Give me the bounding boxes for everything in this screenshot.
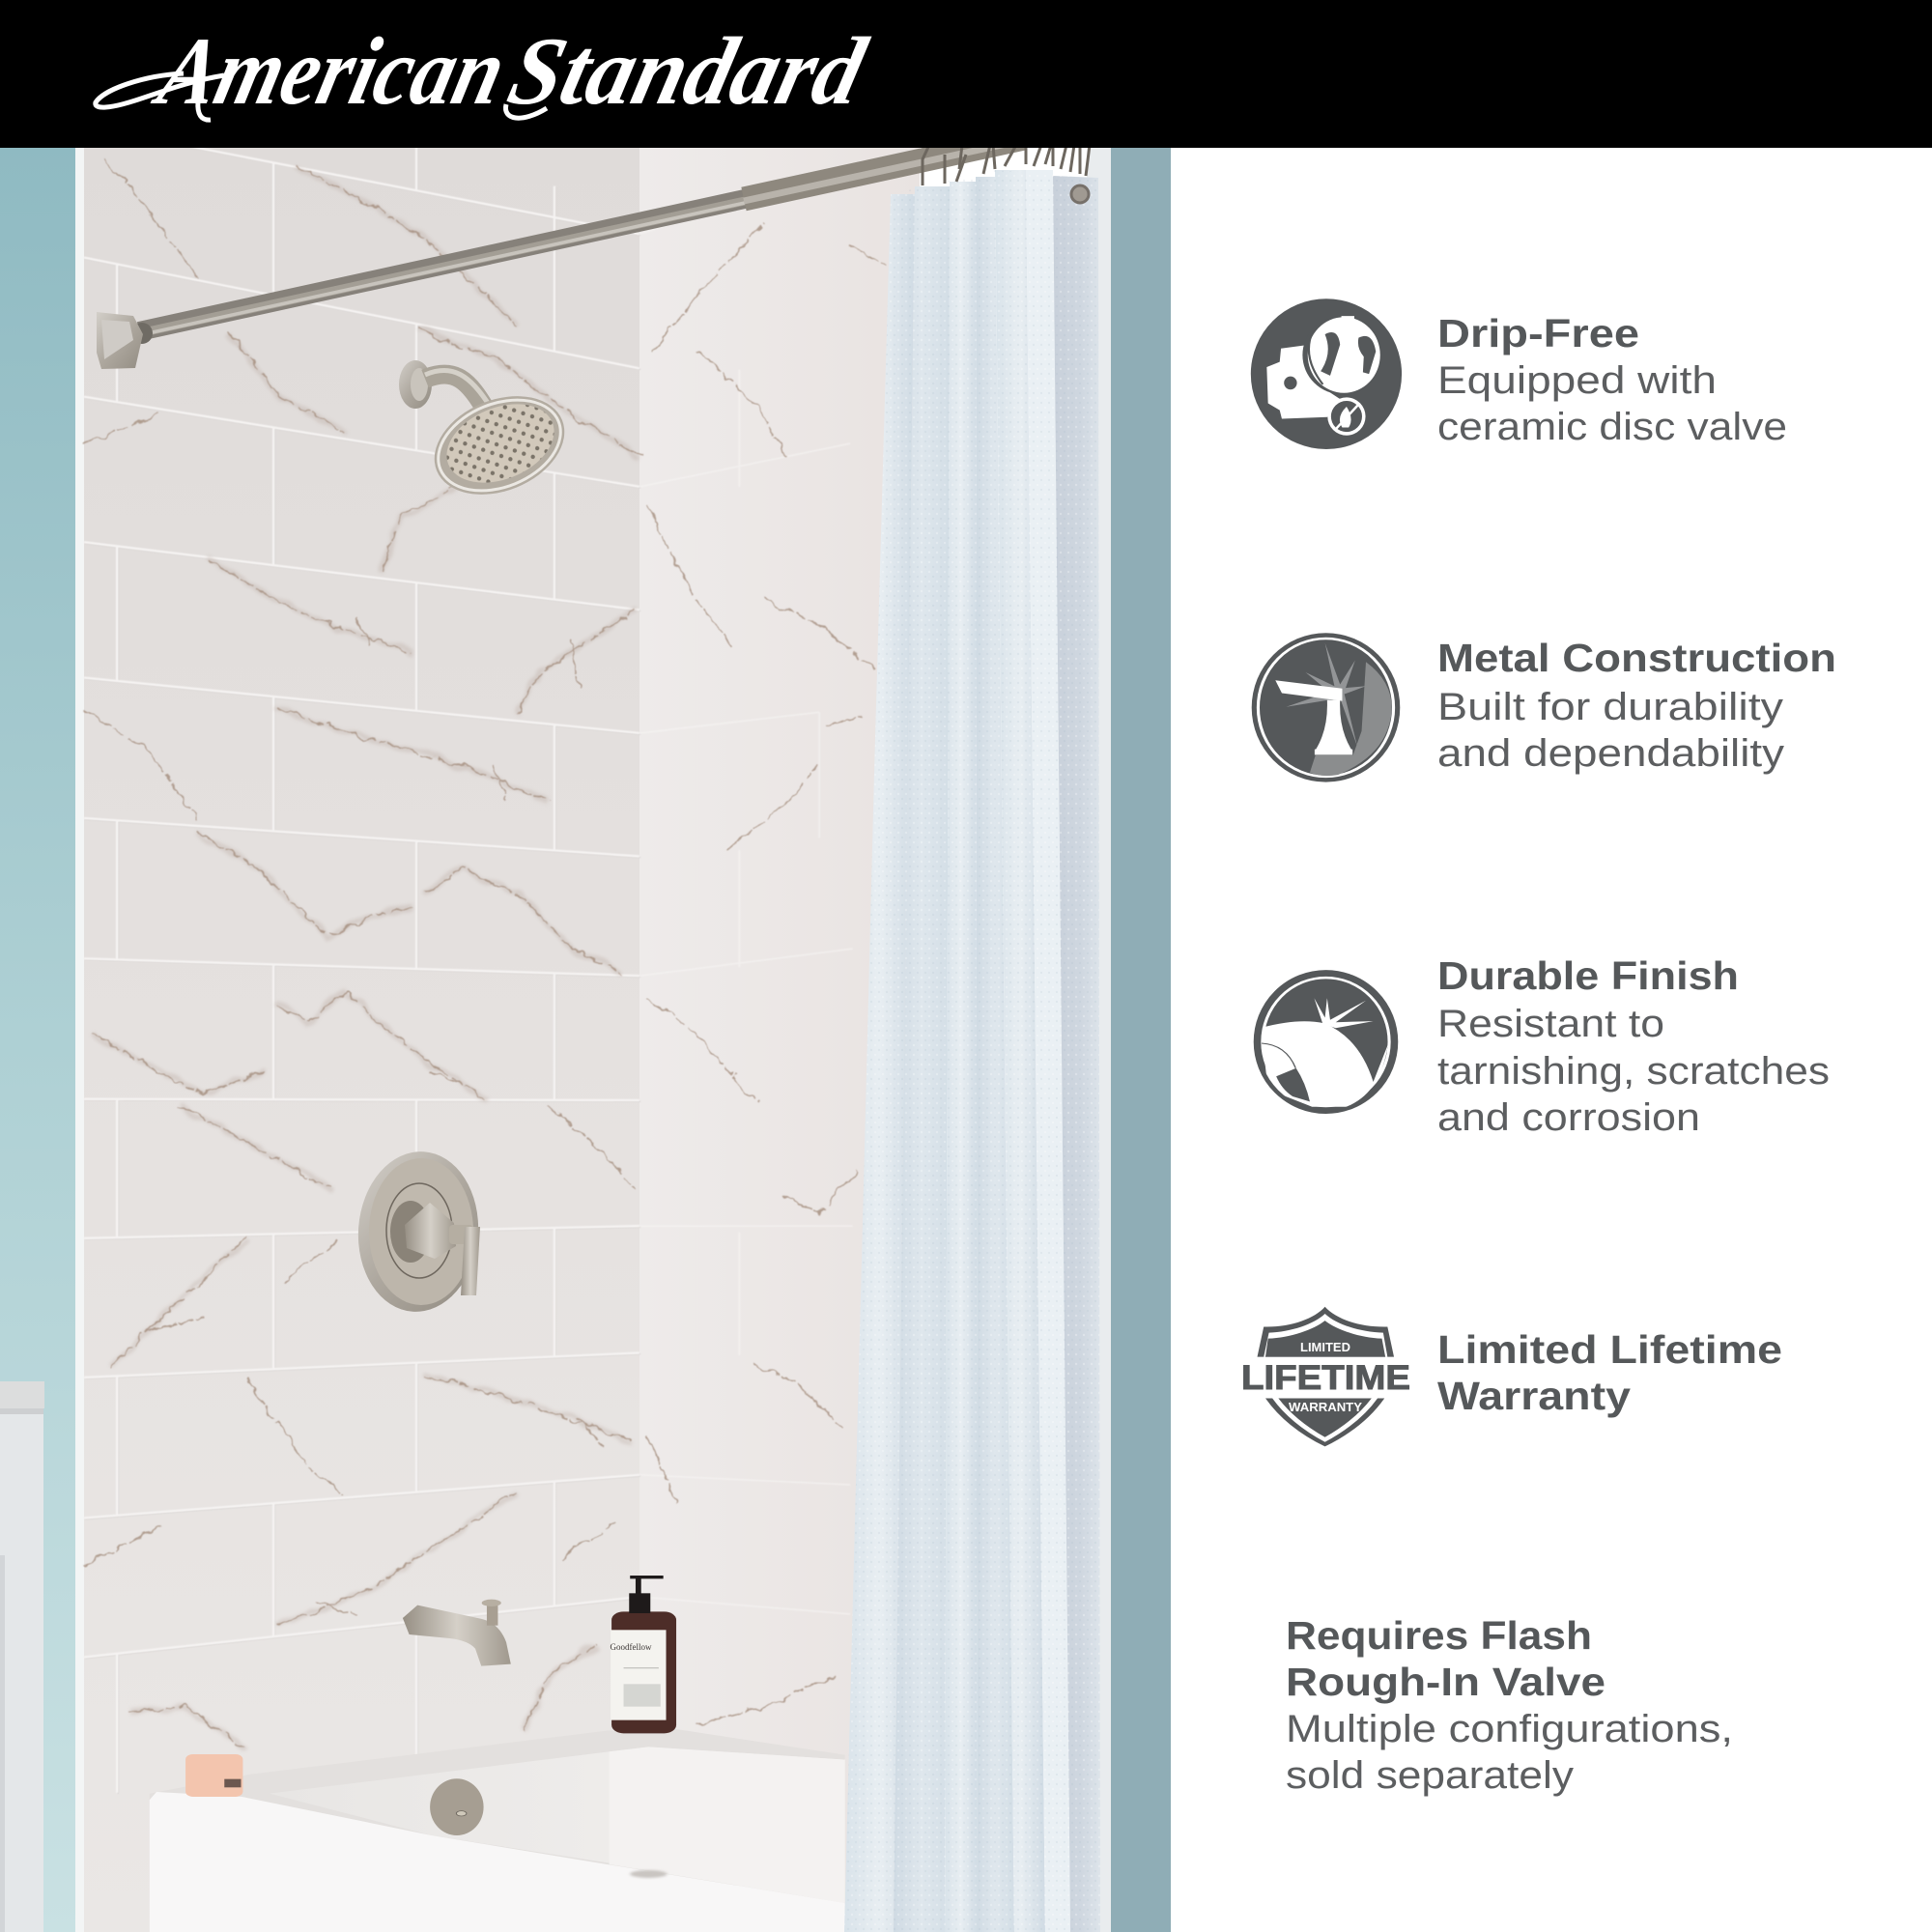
side wall grout [639, 185, 853, 1614]
description: Resistant to [1437, 1003, 1664, 1045]
feature: requires flash rough-in valve [1286, 1613, 1733, 1797]
feature: limited lifetime warranty: Warranty [1437, 1374, 1631, 1418]
grout lines [84, 126, 639, 1793]
description: Built for durability [1437, 686, 1783, 728]
heading: Requires Flash [1286, 1613, 1592, 1658]
right white trim behind curtain [1087, 145, 1111, 1932]
soft vein halo [93, 166, 639, 1749]
feature: durable finish: tarnishing, scratches [1437, 1050, 1830, 1093]
right teal wall [1111, 145, 1171, 1932]
drain overflow plate [430, 1778, 484, 1835]
tub side interior [610, 1747, 845, 1903]
side tiled wall [639, 145, 920, 1932]
icon: lifetime warranty shield: LIMITED [1300, 1340, 1350, 1354]
marble reflection on tub rim [630, 1870, 667, 1878]
panel: bathroom photo [0, 126, 1171, 1932]
bathtub, spout and accessories [150, 1576, 845, 1932]
heading: Drip-Free [1437, 311, 1639, 355]
tile grout and marble veins [84, 126, 887, 1794]
icon: lifetime warranty shield: WARRANTY [1289, 1400, 1362, 1414]
shower head [399, 360, 580, 513]
icon: lifetime warranty shield [1241, 1307, 1410, 1446]
logo: American Standard wordmark [96, 17, 876, 125]
shower rod [97, 138, 1024, 369]
logo: American Standard wordmark: Standard [499, 17, 876, 125]
header band [0, 0, 1932, 148]
icon: ceramic disc valve [1251, 298, 1402, 449]
heading: Rough-In Valve [1286, 1660, 1605, 1704]
tub front apron [150, 1792, 845, 1932]
description: sold separately [1286, 1754, 1574, 1797]
shower valve trim plate and handle [353, 1148, 484, 1316]
heading: Metal Construction [1437, 636, 1836, 680]
tub deck ledge [150, 1729, 845, 1932]
shower curtain [844, 170, 1100, 1932]
panel: white features column [1171, 145, 1932, 1932]
heading: Durable Finish [1437, 953, 1739, 998]
heading: Limited Lifetime [1437, 1327, 1782, 1372]
feature: metal construction [1252, 633, 1836, 782]
heading [1286, 1613, 1605, 1704]
feature: durable finish: and corrosion [1437, 1096, 1700, 1139]
tub spout [403, 1600, 511, 1666]
soap bottle [611, 1576, 676, 1733]
description [1286, 1708, 1733, 1797]
left teal wall [0, 145, 75, 1932]
description: Multiple configurations, [1286, 1708, 1733, 1750]
curtain hooks [923, 145, 1090, 203]
marble veins [84, 160, 887, 1749]
feature: limited lifetime warranty [1241, 1307, 1782, 1446]
icon: polished finish [1256, 972, 1396, 1112]
back tiled wall [84, 145, 639, 1932]
cabinet at left edge [0, 1381, 44, 1932]
icon: metal handle [1252, 633, 1400, 782]
grout shadow [85, 127, 640, 1794]
icon: lifetime warranty shield: LIFETIME [1241, 1359, 1410, 1397]
logo: American Standard wordmark: American [144, 17, 516, 125]
bottle label text: Goodfellow [611, 1642, 652, 1652]
white trim strip [75, 145, 84, 1932]
feature: drip-free [1251, 298, 1787, 449]
tub interior [270, 1747, 845, 1903]
description: Equipped with [1437, 359, 1717, 402]
feature: durable finish [1256, 953, 1830, 1139]
cream jar [185, 1754, 242, 1797]
feature: metal construction: and dependability [1437, 732, 1784, 775]
feature: drip-free: ceramic disc valve [1437, 406, 1787, 448]
